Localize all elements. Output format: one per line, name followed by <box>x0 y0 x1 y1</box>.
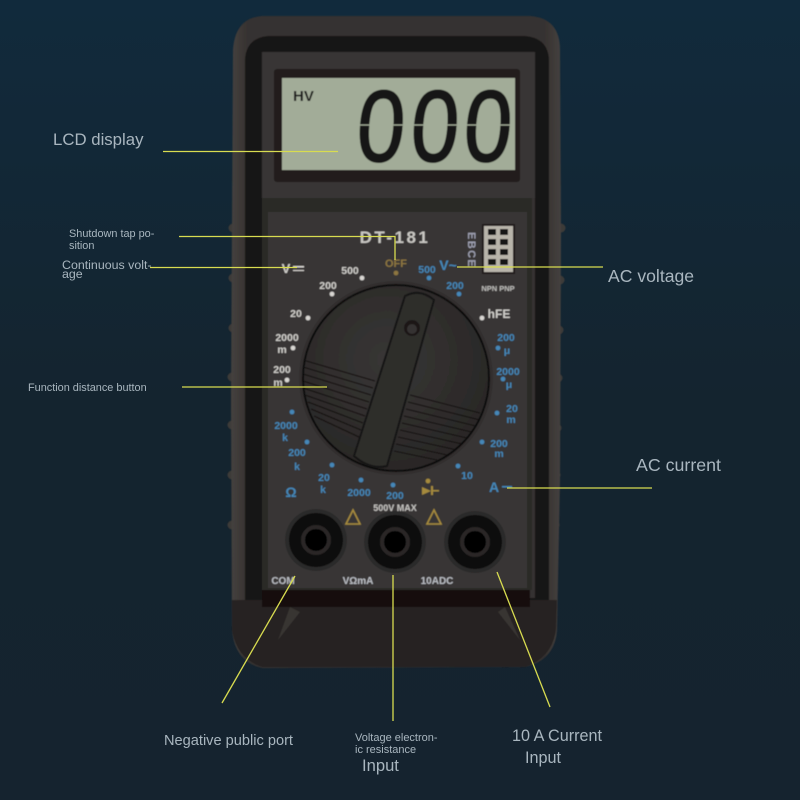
icon: diode mark <box>422 479 439 495</box>
label: AC current: AC current <box>636 455 721 475</box>
blue range marks: 200 <box>386 490 404 502</box>
input jack: V ohm mA <box>364 511 426 573</box>
model name: DT-181 <box>360 228 430 247</box>
blue range marks: μ <box>504 345 510 357</box>
label: LCD display: LCD display <box>53 130 144 149</box>
LCD bezel and screen <box>262 52 535 198</box>
blue range marks: 2000 <box>274 420 298 432</box>
white range marks: m <box>277 344 287 356</box>
blue range marks: 10 <box>461 470 473 482</box>
leader line: AC current <box>507 487 652 489</box>
leader line: AC voltage <box>457 266 603 268</box>
dial indicator hole <box>404 320 420 336</box>
label: voltage electronic resistance input: ic resistance <box>355 744 416 756</box>
transistor socket: EBCE <box>465 232 477 268</box>
label: voltage electronic resistance input: Input <box>362 756 399 775</box>
white range marks: 200 <box>319 280 337 292</box>
function dial <box>299 281 493 475</box>
jack labels: VΩmA <box>343 576 373 587</box>
label: voltage electronic resistance input: Voltage electron- <box>355 732 438 744</box>
LCD HV indicator: HV <box>293 88 314 105</box>
body shell <box>228 16 566 668</box>
label: 10 A current input: 10 A Current <box>512 727 602 745</box>
white range marks: 2000 <box>275 332 299 344</box>
blue range marks: A <box>489 479 499 495</box>
jack labels: COM <box>271 576 295 587</box>
blue range marks: 20 <box>506 403 518 415</box>
input jack: COM <box>285 509 347 571</box>
multimeter device <box>228 16 566 668</box>
input jack: 10ADC <box>444 511 506 573</box>
leader line: negative port <box>222 576 295 703</box>
blue range marks: k <box>294 461 300 473</box>
blue range marks: k <box>320 484 326 496</box>
blue range marks: μ <box>506 379 512 391</box>
leader line: function button <box>182 386 327 388</box>
leader line: continuous voltage <box>150 266 297 268</box>
label: 10 A current input: Input <box>525 749 562 767</box>
dial panel <box>262 198 532 590</box>
label: shutdown tap position: sition <box>69 240 94 252</box>
blue range marks: V~ <box>439 257 457 273</box>
label: AC voltage: AC voltage <box>608 266 694 286</box>
transistor socket <box>465 224 515 293</box>
label: continuous voltage: Continuous volt- <box>62 258 152 272</box>
white range marks: 200 <box>273 364 291 376</box>
label: shutdown tap position: Shutdown tap po- <box>69 228 155 240</box>
blue range marks: 500 <box>418 264 436 276</box>
blue range marks: 200 <box>490 438 508 450</box>
LCD digits <box>353 70 516 183</box>
transistor socket: NPN PNP <box>481 284 515 293</box>
OFF mark: OFF <box>385 258 407 270</box>
blue range marks: m <box>506 414 516 426</box>
white range marks: V <box>282 261 291 276</box>
white range marks <box>273 261 510 389</box>
blue range marks: 200 <box>446 280 464 292</box>
icon: warning triangles <box>346 510 441 524</box>
white range marks: hFE <box>488 307 510 321</box>
dial grip ridges <box>303 360 480 469</box>
blue range marks: 2000 <box>347 487 371 499</box>
label: function distance button: Function distance button <box>28 382 147 394</box>
leader line: voltage input <box>392 575 394 721</box>
blue range marks: 200 <box>497 332 515 344</box>
voltage warning text: 500V MAX <box>373 503 417 513</box>
white range marks: m <box>273 377 283 389</box>
blue range marks <box>274 257 520 502</box>
dial pointer <box>354 293 434 467</box>
blue range marks: Ω <box>285 484 297 500</box>
LCD digits: 0 <box>460 70 516 183</box>
blue range marks: k <box>282 432 288 444</box>
leader line: LCD display <box>163 150 338 152</box>
blue range marks: 2000 <box>496 366 520 378</box>
leader line: 10 A input <box>497 572 550 707</box>
LCD digits: 0 <box>353 70 409 183</box>
leader line: shutdown position <box>179 236 395 260</box>
label: continuous voltage: age <box>62 267 83 281</box>
jack labels <box>271 576 453 587</box>
jack labels: 10ADC <box>421 576 453 587</box>
blue range marks: 200 <box>288 447 306 459</box>
blue range marks: 20 <box>318 472 330 484</box>
OFF mark <box>385 258 407 275</box>
white range marks: 20 <box>290 308 302 320</box>
LCD digits: 0 <box>407 70 463 183</box>
label: negative public port: Negative public port <box>164 733 293 749</box>
blue range marks: m <box>494 448 504 460</box>
white range marks: 500 <box>341 265 359 277</box>
